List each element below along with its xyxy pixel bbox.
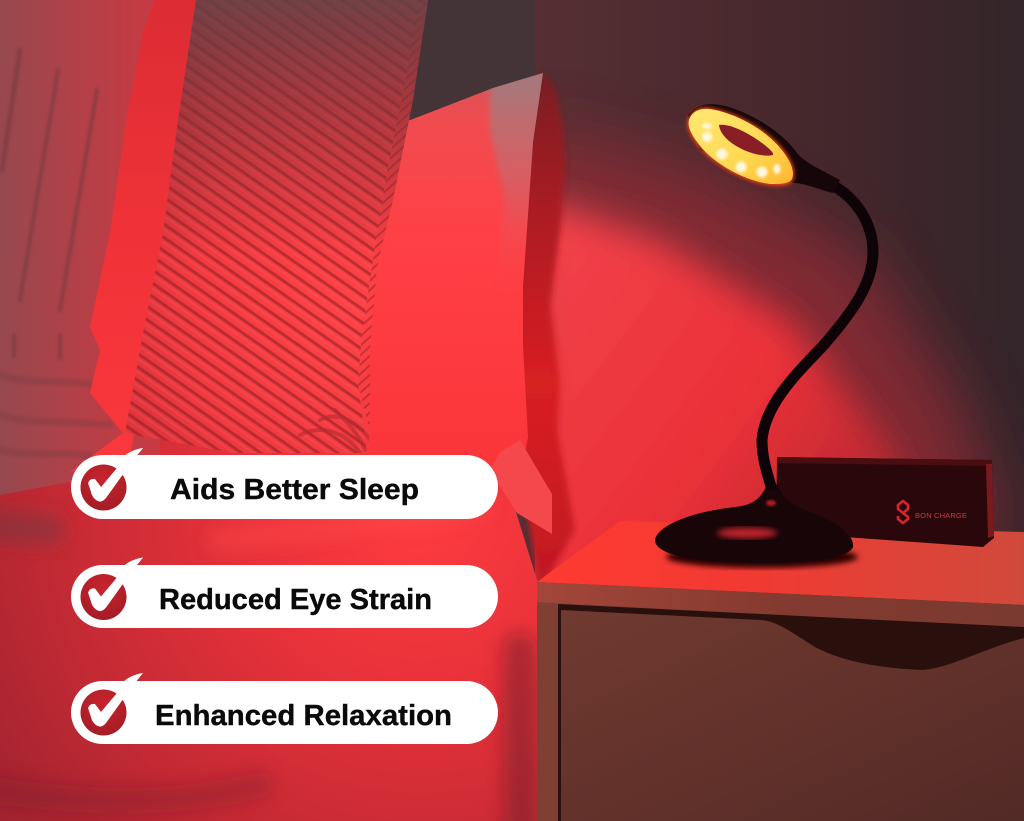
brand name: BON CHARGE (915, 511, 967, 520)
lamp head back and collar (688, 104, 840, 193)
benefit pill: Enhanced Relaxation (71, 673, 498, 744)
nightstand (537, 521, 1024, 821)
ring opening (719, 125, 773, 156)
light ring (689, 109, 793, 184)
nightstand front edge (537, 582, 1024, 627)
benefit pill: Aids Better Sleep (71, 448, 498, 519)
icon: brand logo (898, 501, 908, 523)
bed sheet (0, 425, 537, 821)
nightstand top (537, 521, 1024, 605)
base highlight (717, 528, 777, 538)
icon: check mark (80, 558, 143, 620)
wall light beam (530, 125, 1010, 610)
striped pillow (120, 0, 440, 460)
lamp shadow (666, 546, 858, 568)
icon: check mark (80, 673, 143, 736)
label: Reduced Eye Strain (159, 584, 432, 616)
white pillow (370, 73, 552, 534)
label: Aids Better Sleep (170, 474, 419, 506)
LEDs (702, 123, 780, 178)
blanket creases (0, 50, 110, 456)
lamp (655, 104, 873, 568)
pillowcase band (70, 0, 200, 472)
lamp base (655, 485, 853, 563)
product box (776, 457, 994, 547)
benefit pill: Reduced Eye Strain (71, 558, 498, 628)
gooseneck arm (762, 186, 873, 490)
pillow shadow on wall (515, 73, 575, 590)
textured blanket (0, 0, 160, 495)
bed shading folds (0, 505, 522, 821)
icon: check mark (80, 448, 143, 510)
lamp glow (688, 108, 794, 185)
blanket pile at left (0, 0, 200, 495)
label: Enhanced Relaxation (155, 700, 452, 732)
drawer front (561, 610, 1024, 821)
pillow corner flap (490, 440, 552, 534)
drawer gap (558, 604, 1024, 821)
nightstand body (537, 582, 1024, 821)
